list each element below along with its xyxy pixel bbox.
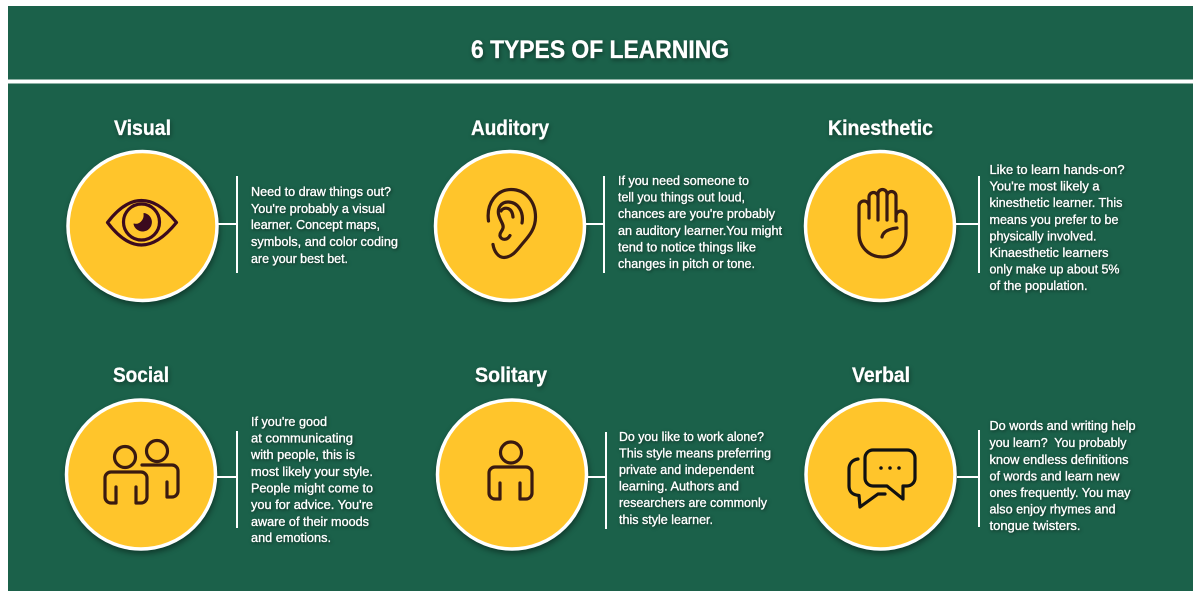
heading: Solitary: Solitary: [475, 364, 547, 387]
circle: Solitary: [438, 400, 586, 549]
text: Social description: People might come to: [251, 480, 373, 496]
text: Social description: [250, 414, 373, 545]
text: Solitary description: researchers are commonly: [619, 495, 767, 510]
text: Visual description: symbols, and color coding: [251, 234, 398, 249]
text: Kinesthetic description: of the population.: [990, 278, 1088, 293]
text: Kinesthetic description: [990, 162, 1124, 293]
text: Auditory description: tell you things out loud,: [618, 190, 745, 204]
heading: Kinesthetic: Kinesthetic: [828, 117, 933, 140]
circle: Verbal: [806, 400, 955, 549]
heading: Verbal: Verbal: [852, 364, 910, 387]
text: Social description: aware of their moods: [251, 514, 369, 529]
text: Visual description: [251, 184, 398, 266]
icon: eye: [108, 200, 176, 245]
text: Auditory description: If you need someone to: [618, 173, 749, 188]
text: Solitary description: This style means preferring: [619, 446, 771, 460]
connector: [218, 176, 237, 273]
text: Verbal description: also enjoy rhymes and: [990, 502, 1116, 516]
panel: Visual: [68, 117, 398, 300]
panel: Social: [66, 364, 373, 549]
text: Verbal description: [990, 418, 1136, 533]
text: Auditory description: an auditory learner.You might: [618, 223, 782, 238]
text: Kinesthetic description: physically involved.: [990, 228, 1096, 244]
circle: Auditory: [436, 152, 584, 300]
circle: Kinesthetic: [806, 152, 954, 300]
text: Verbal description: of words and learn new: [990, 468, 1120, 484]
panel: Verbal: [806, 364, 1136, 549]
connector: [956, 176, 979, 273]
text: Verbal description: Do words and writing help: [990, 418, 1136, 433]
text: Kinesthetic description: only make up about 5%: [990, 262, 1120, 276]
text: Visual description: You're probably a visual: [251, 201, 385, 216]
text: Verbal description: tongue twisters.: [990, 518, 1080, 533]
text: Social description: with people, this is: [250, 447, 355, 462]
title: 6 TYPES OF LEARNING: [471, 36, 729, 64]
text: Kinesthetic description: Kinaesthetic learners: [990, 245, 1109, 260]
text: Kinesthetic description: You're most likely a: [990, 178, 1100, 194]
text: Kinesthetic description: Like to learn hands-on?: [990, 162, 1124, 177]
text: Solitary description: Do you like to work alone?: [619, 429, 764, 444]
text: Visual description: Need to draw things out?: [251, 184, 391, 199]
panel: Auditory: [436, 117, 782, 300]
icon: ear: [488, 190, 536, 258]
text: Social description: at communicating: [251, 430, 353, 446]
text: Kinesthetic description: kinesthetic learner. This: [990, 195, 1123, 210]
panel: Solitary: [438, 364, 771, 549]
text: Auditory description: chances are you're probably: [618, 206, 775, 221]
icon: speech bubbles: [849, 450, 915, 507]
text: Kinesthetic description: means you prefer to be: [990, 212, 1118, 227]
text: Auditory description: changes in pitch or tone.: [618, 256, 755, 271]
text: Social description: and emotions.: [251, 530, 331, 545]
text: Auditory description: [618, 173, 782, 271]
heading: Auditory: Auditory: [471, 117, 549, 140]
text: Verbal description: know endless definitions: [990, 452, 1129, 467]
text: Visual description: learner. Concept maps,: [251, 217, 380, 232]
circle: Social: [66, 400, 216, 549]
panel: Kinesthetic: [806, 117, 1124, 300]
header band: [8, 6, 1193, 80]
heading: Visual: Visual: [114, 117, 171, 140]
circle: Visual: [68, 152, 217, 300]
text: Social description: If you're good: [251, 414, 327, 429]
text: Auditory description: tend to notice things like: [618, 240, 756, 254]
text: Verbal description: ones frequently. You may: [990, 485, 1131, 500]
heading: Social: Social: [113, 364, 169, 387]
connector: [588, 432, 606, 529]
text: Solitary description: private and independent: [619, 462, 754, 477]
icon: single person: [489, 442, 532, 499]
text: Social description: you for advice. You're: [251, 497, 373, 512]
text: Visual description: are your best bet.: [251, 251, 348, 266]
text: Verbal description: you learn? You probably: [990, 435, 1127, 450]
connector: [586, 176, 604, 273]
text: Solitary description: learning. Authors and: [619, 478, 739, 494]
text: Solitary description: this style learner.: [619, 512, 713, 527]
text: Solitary description: [619, 429, 771, 527]
connector: [217, 431, 237, 528]
connector: [957, 430, 979, 527]
icon: hand: [859, 190, 906, 257]
icon: two people: [105, 440, 178, 503]
text: Social description: most likely your style.: [251, 464, 373, 479]
